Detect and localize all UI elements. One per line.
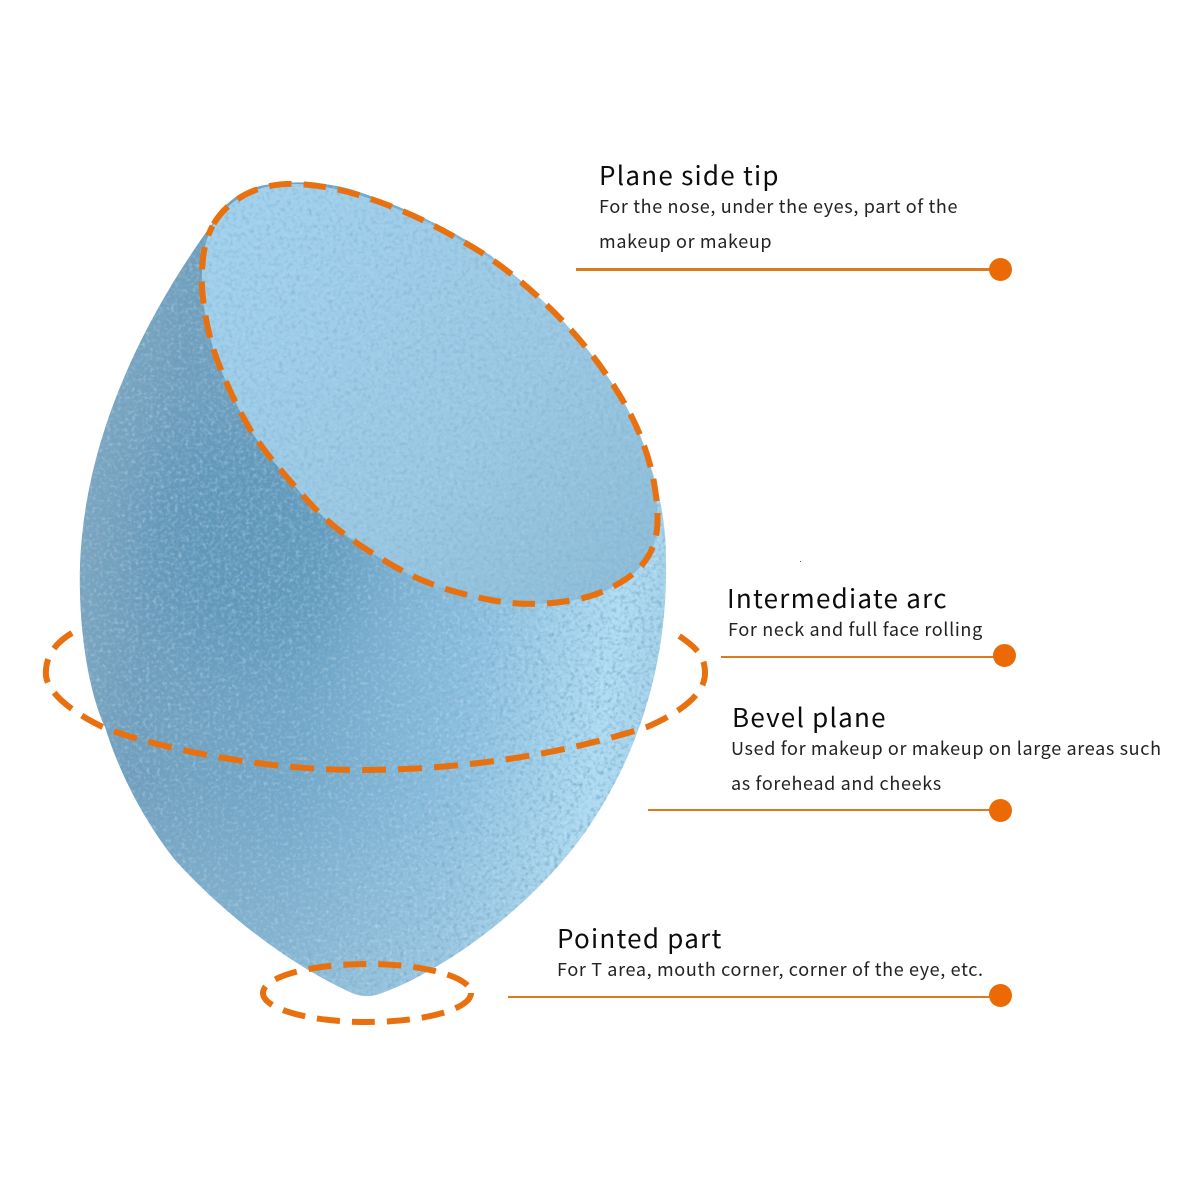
heading: pointed part: Pointed part [557,919,723,956]
text: plane side tip description: For the nose, under the eyes, part of the [599,193,958,219]
leader line [576,268,996,271]
speck [800,561,801,562]
callout: pointed part [508,919,1012,1007]
callout: intermediate arc [721,579,1016,667]
dot marker [993,644,1016,667]
text: intermediate arc description: For neck and full face rolling [728,616,983,642]
callout: bevel plane [648,698,1162,822]
leader line [508,996,998,998]
callout: plane side tip [576,156,1012,281]
text: pointed part description: For T area, mouth corner, corner of the eye, etc. [557,956,984,982]
sponge illustration [42,180,801,1025]
text: plane side tip description [599,193,958,254]
text: bevel plane description [731,735,1162,796]
bevel plane surface [202,184,658,604]
heading: intermediate arc: Intermediate arc [727,579,948,616]
heading: plane side tip: Plane side tip [599,156,780,193]
dashed outline: pointed part [263,964,471,1022]
leader line [648,809,993,811]
text: bevel plane description: Used for makeup or makeup on large areas such [731,735,1162,761]
sponge body [80,182,666,996]
dot marker [989,258,1012,281]
text: plane side tip description: makeup or makeup [599,228,772,254]
leader line [721,656,1001,658]
dot marker [989,799,1012,822]
dot marker [989,984,1012,1007]
dashed outline: intermediate arc [46,632,705,770]
dashed outline: plane side tip [202,184,658,604]
heading: bevel plane: Bevel plane [732,698,887,735]
text: bevel plane description: as forehead and cheeks [731,770,942,796]
